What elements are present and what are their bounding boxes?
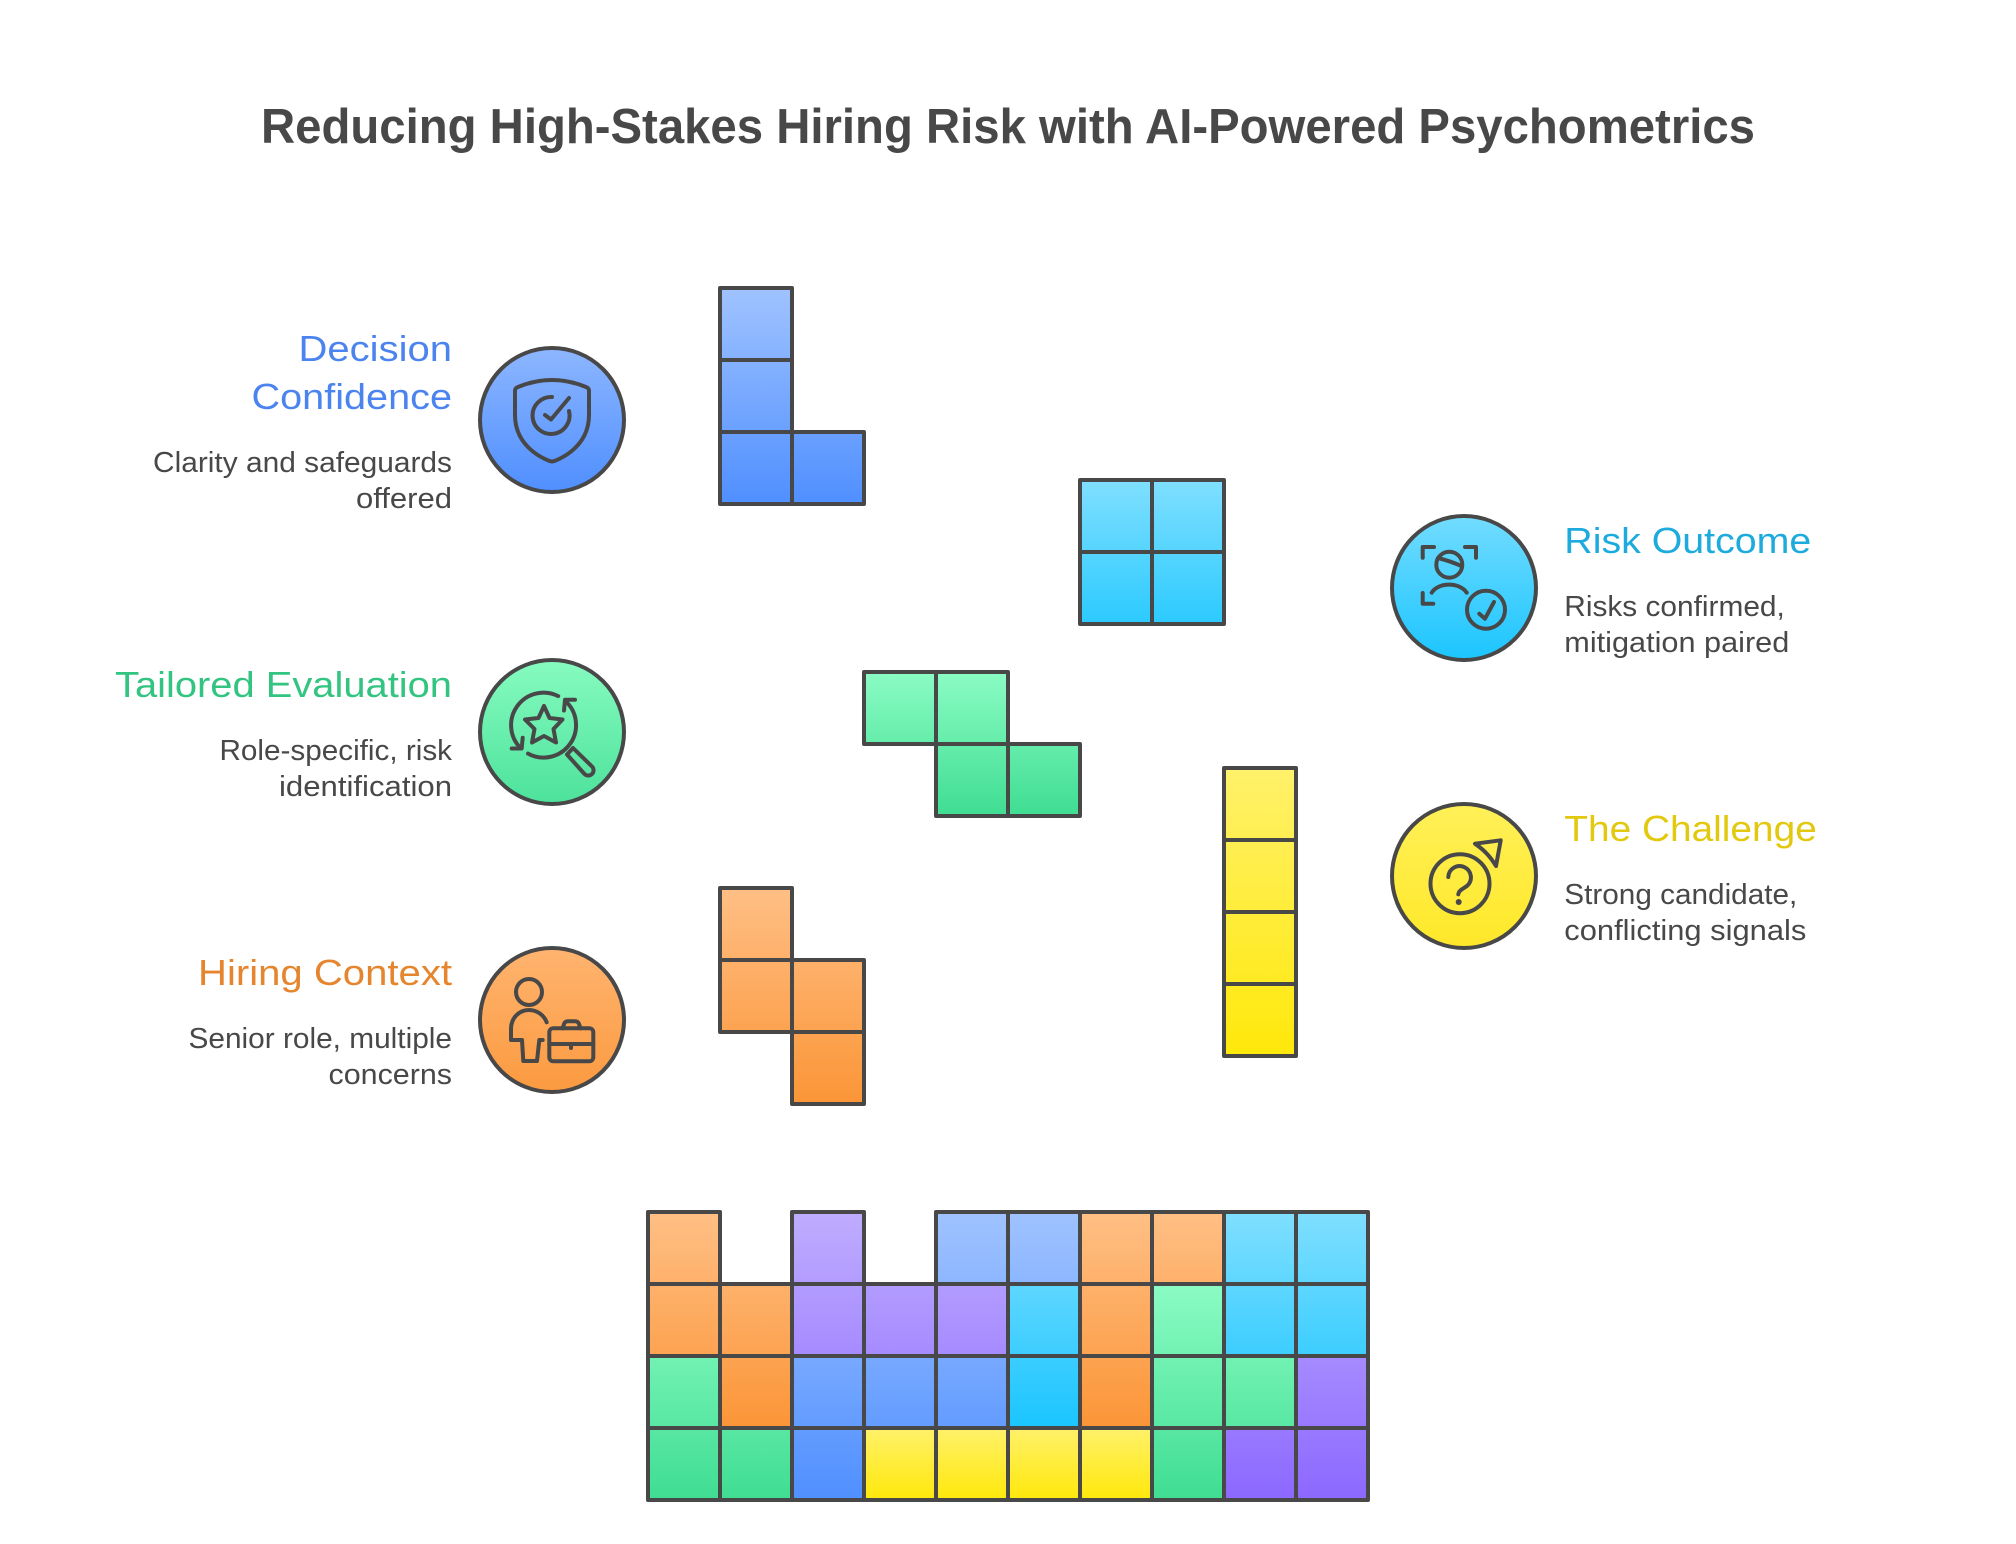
heading: decision confidence: Confidence (252, 376, 452, 417)
text: decision confidence description (153, 447, 452, 515)
icon: question with arrow (1392, 804, 1536, 948)
text: tailored evaluation description: Role-specific, risk (220, 735, 453, 767)
grid: cyan cells (1008, 1212, 1368, 1428)
stacked tetromino grid (648, 1212, 1368, 1500)
heading: tailored evaluation: Tailored Evaluation (115, 664, 452, 705)
heading: decision confidence (252, 328, 452, 417)
icon: person with briefcase (480, 948, 624, 1092)
text: risk outcome description (1564, 591, 1789, 659)
text: hiring context description: Senior role, multiple (188, 1023, 452, 1055)
panel: tailored evaluation label (115, 664, 453, 803)
text: the challenge description: Strong candidate, (1564, 879, 1797, 911)
text: hiring context description: concerns (328, 1059, 452, 1091)
text: tailored evaluation description: identification (279, 771, 452, 803)
panel: hiring context label (188, 952, 452, 1091)
heading: decision confidence: Decision (298, 328, 452, 369)
panel: risk outcome label (1564, 520, 1811, 659)
grid: yellow cells (864, 1428, 1152, 1500)
tetromino: green Z piece (864, 672, 1080, 816)
grid: purple cells (792, 1212, 1368, 1500)
icon: person scan with check (1392, 516, 1536, 660)
tetromino: blue L piece (720, 288, 864, 504)
icon: shield check (480, 348, 624, 492)
text: risk outcome description: mitigation paired (1564, 627, 1789, 659)
tetromino: orange S piece (720, 888, 864, 1104)
grid: green cells (648, 1284, 1296, 1500)
title: Reducing High-Stakes Hiring Risk with AI-Powered Psychometrics (261, 100, 1755, 154)
grid: blue cells (792, 1212, 1080, 1500)
text: tailored evaluation description (220, 735, 453, 803)
text: the challenge description: conflicting signals (1564, 915, 1806, 947)
panel: the challenge label (1564, 808, 1817, 947)
heading: hiring context: Hiring Context (198, 952, 452, 993)
text: decision confidence description: offered (356, 483, 452, 515)
tetromino: yellow I piece (1224, 768, 1296, 1056)
text: decision confidence description: Clarity and safeguards (153, 447, 452, 479)
icon: star magnifier (480, 660, 624, 804)
tetromino: cyan square piece (1080, 480, 1224, 624)
heading: the challenge: The Challenge (1564, 808, 1817, 849)
heading: risk outcome: Risk Outcome (1564, 520, 1811, 561)
panel: decision confidence label (153, 328, 452, 515)
text: hiring context description (188, 1023, 452, 1091)
text: risk outcome description: Risks confirmed, (1564, 591, 1785, 623)
text: the challenge description (1564, 879, 1806, 947)
grid: orange cells (648, 1212, 1224, 1428)
